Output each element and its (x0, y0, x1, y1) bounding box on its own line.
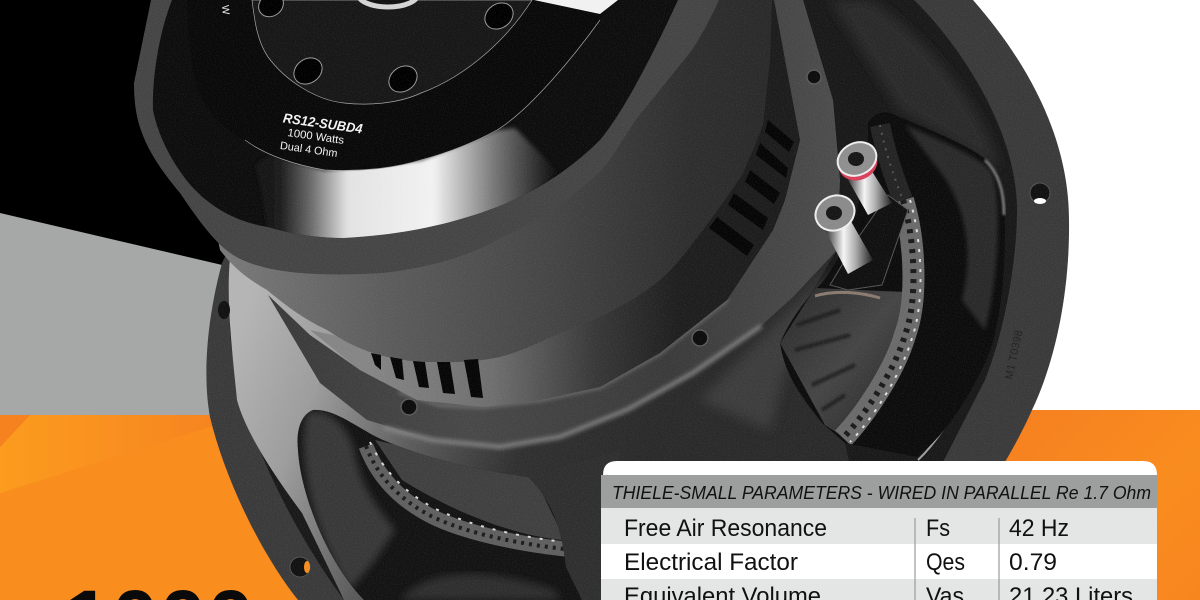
textured band (268, 0, 840, 447)
rib surface (229, 0, 880, 600)
table header: THIELE-SMALL PARAMETERS - WIRED IN PARALLEL Re 1.7 Ohm (612, 483, 1151, 503)
lower window (298, 410, 582, 600)
subwoofer (134, 0, 1069, 600)
table header (601, 475, 1157, 508)
model label: RS12-SUBD4 (282, 110, 364, 137)
magnet body (200, 0, 772, 362)
plate outline (245, 20, 600, 171)
column dividers (915, 518, 999, 600)
rib sheen (700, 270, 830, 430)
panel: Thiele-Small parameters table (601, 461, 1157, 600)
model label: W (219, 5, 231, 16)
cap highlight (255, 128, 558, 243)
magnet cap inner recess (153, 0, 678, 238)
orange band: right (1000, 410, 1200, 600)
cone mottling (795, 310, 855, 410)
terminal bar (846, 165, 892, 215)
row: electrical factor (601, 544, 1157, 579)
stitched surround lower (843, 200, 913, 438)
rear plate (187, 0, 612, 171)
mounting holes (254, 0, 518, 97)
table background (603, 461, 1157, 600)
vent ring (310, 0, 800, 407)
basket inner surface (230, 0, 1017, 600)
surround lower sheen (400, 574, 560, 600)
terminal bracket (830, 195, 908, 290)
right vents (709, 120, 794, 256)
glint (308, 523, 322, 541)
flange highlight line (918, 317, 994, 460)
magnet cap outer ring (134, 0, 719, 274)
black top-left block (0, 0, 260, 280)
model label: 1000 Watts (287, 127, 345, 147)
terminal bracket base (815, 292, 880, 298)
grey diagonal block (0, 213, 300, 415)
row: free air resonance (601, 508, 1157, 544)
inner wall sheen (830, 0, 1000, 170)
stitched surround (366, 446, 565, 549)
model label (219, 5, 364, 160)
window rim glint (985, 160, 1004, 215)
upper window (780, 112, 1005, 457)
orange band: left (0, 405, 420, 600)
lower terminal cap (810, 189, 860, 237)
cap right white glint (534, 0, 618, 14)
powder coat texture (134, 0, 1069, 600)
cone (780, 288, 905, 440)
row: free air resonance: Fs (926, 515, 950, 542)
screws (401, 70, 821, 415)
rib strip by lower window (528, 450, 620, 600)
flange holes (218, 183, 1050, 577)
cone (375, 440, 562, 540)
inner disc (252, 0, 532, 104)
row: electrical factor: 0.79 (1009, 549, 1057, 576)
basket flange (206, 0, 1069, 600)
model label: Dual 4 Ohm (279, 140, 338, 160)
flange stamp: M1 T0398 (1003, 329, 1025, 381)
band highlights (385, 300, 760, 447)
row: free air resonance: Free Air Resonance (624, 515, 827, 542)
row: equivalent volume (601, 579, 1157, 600)
speaker terminals (810, 136, 908, 298)
row: electrical factor: Qes (926, 549, 965, 576)
lower vents (371, 353, 483, 398)
surround inner surface (304, 411, 395, 590)
stitched surround upper (880, 125, 903, 200)
row: free air resonance: 42 Hz (1009, 515, 1069, 542)
red terminal cap (832, 136, 883, 187)
lower terminal bar (824, 216, 873, 274)
inner wall (905, 125, 998, 330)
row: electrical factor: Electrical Factor (624, 549, 798, 576)
center bolt ring (358, 0, 418, 7)
